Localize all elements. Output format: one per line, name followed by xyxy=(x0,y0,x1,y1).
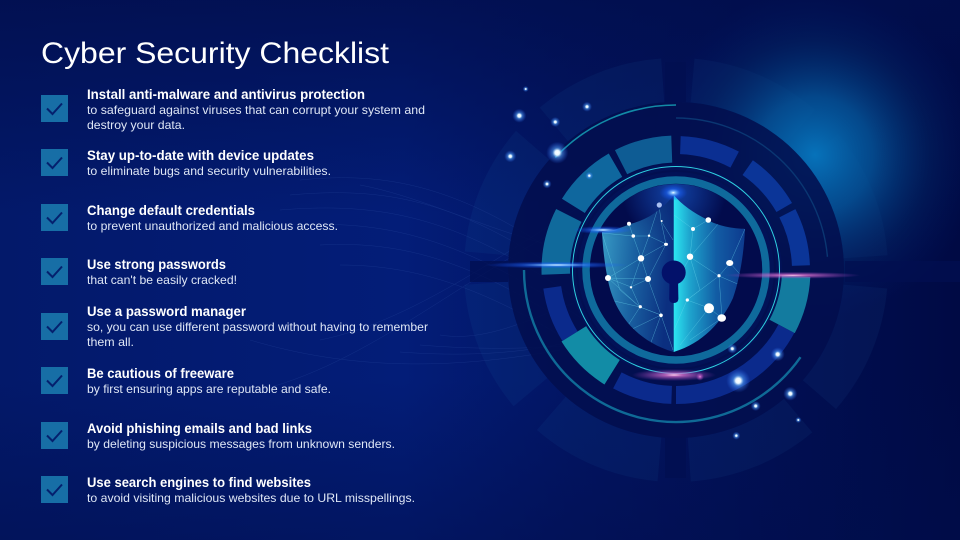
checklist item 1: Install anti-malware and antivirus protection xyxy=(87,86,365,102)
checkbox 5 xyxy=(41,313,68,340)
checklist item 1: to safeguard against viruses that can corrupt your system and xyxy=(87,103,425,117)
checkbox 1 xyxy=(41,95,68,122)
checklist item 3: to prevent unauthorized and malicious access. xyxy=(87,219,338,233)
outer faint segmented ring xyxy=(408,2,944,538)
checklist item 2 xyxy=(41,147,331,178)
checklist item 7 xyxy=(41,420,395,451)
checklist item 7: Avoid phishing emails and bad links xyxy=(87,420,312,436)
checklist item 5 xyxy=(41,303,428,349)
title: Cyber Security Checklist xyxy=(41,37,390,70)
keyhole xyxy=(662,260,686,303)
band between rings xyxy=(578,172,774,368)
glowing particles xyxy=(504,86,801,440)
shield xyxy=(602,195,745,352)
shield nodes xyxy=(605,202,733,322)
checklist item 5: them all. xyxy=(87,335,134,349)
checklist item 4 xyxy=(41,256,237,287)
checklist item 5: Use a password manager xyxy=(87,303,247,319)
checkbox 3 xyxy=(41,204,68,231)
dark cross bars xyxy=(470,62,960,478)
cyber ring graphic xyxy=(408,0,960,538)
checkbox 2 xyxy=(41,149,68,176)
checklist item 4: Use strong passwords xyxy=(87,256,226,272)
checklist item 4: that can't be easily cracked! xyxy=(87,273,237,287)
inner top glow xyxy=(590,184,762,356)
checklist item 2: Stay up-to-date with device updates xyxy=(87,147,314,163)
checkbox 6 xyxy=(41,367,68,394)
thick teal ring xyxy=(586,180,766,360)
checkbox 4 xyxy=(41,258,68,285)
checklist item 8 xyxy=(41,474,415,505)
lens flares xyxy=(485,185,861,381)
checklist item 6 xyxy=(41,365,331,396)
cyan ring xyxy=(572,166,780,374)
thin outer arcs xyxy=(443,37,909,503)
checklist item 8: to avoid visiting malicious websites due to URL misspellings. xyxy=(87,491,415,505)
dark disc xyxy=(508,102,844,438)
checklist item 2: to eliminate bugs and security vulnerabilities. xyxy=(87,164,331,178)
inner dark plate xyxy=(573,167,779,373)
checkbox 8 xyxy=(41,476,68,503)
shield network lines xyxy=(602,195,745,350)
checklist item 6: Be cautious of freeware xyxy=(87,365,234,381)
checklist item 6: by first ensuring apps are reputable and safe. xyxy=(87,382,331,396)
checklist item 3: Change default credentials xyxy=(87,202,255,218)
teal and blue ring segments xyxy=(502,96,850,444)
checklist item 1 xyxy=(41,86,425,132)
checklist item 7: by deleting suspicious messages from unknown senders. xyxy=(87,437,395,451)
checkbox 7 xyxy=(41,422,68,449)
top right glow xyxy=(640,0,960,330)
checklist item 1: destroy your data. xyxy=(87,118,185,132)
wave lines xyxy=(250,170,640,390)
checklist item 8: Use search engines to find websites xyxy=(87,474,311,490)
checklist item 3 xyxy=(41,202,338,233)
checklist item 5: so, you can use different password without having to remember xyxy=(87,320,428,334)
